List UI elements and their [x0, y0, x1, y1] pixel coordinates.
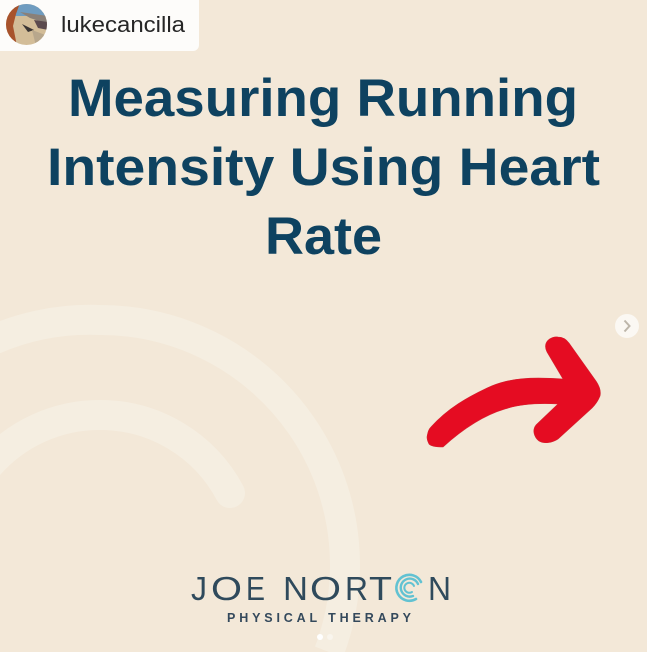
username: lukecancilla	[61, 12, 186, 37]
logo name: N	[283, 570, 308, 607]
logo name: E	[246, 570, 265, 607]
logo name	[191, 570, 451, 607]
title	[47, 69, 600, 266]
logo name: T	[369, 570, 392, 607]
logo name: R	[345, 570, 368, 607]
icon: spiral O	[396, 575, 421, 601]
logo name: J	[191, 570, 207, 607]
logo name: N	[428, 570, 451, 607]
logo: Joe Norton Physical Therapy	[191, 570, 451, 625]
carousel dots	[317, 634, 333, 640]
title: Measuring Running	[68, 69, 578, 128]
title: Intensity Using Heart	[47, 138, 600, 197]
logo name: O	[211, 570, 242, 607]
icon: profile avatar	[5, 3, 48, 46]
arrow: red hand-drawn	[427, 337, 600, 447]
username badge	[0, 0, 199, 51]
title: Rate	[265, 207, 382, 266]
logo subtitle: PHYSICAL THERAPY	[227, 611, 412, 625]
decorative arcs	[0, 320, 345, 652]
icon: next carousel button	[615, 314, 639, 338]
logo name: O	[310, 570, 341, 607]
